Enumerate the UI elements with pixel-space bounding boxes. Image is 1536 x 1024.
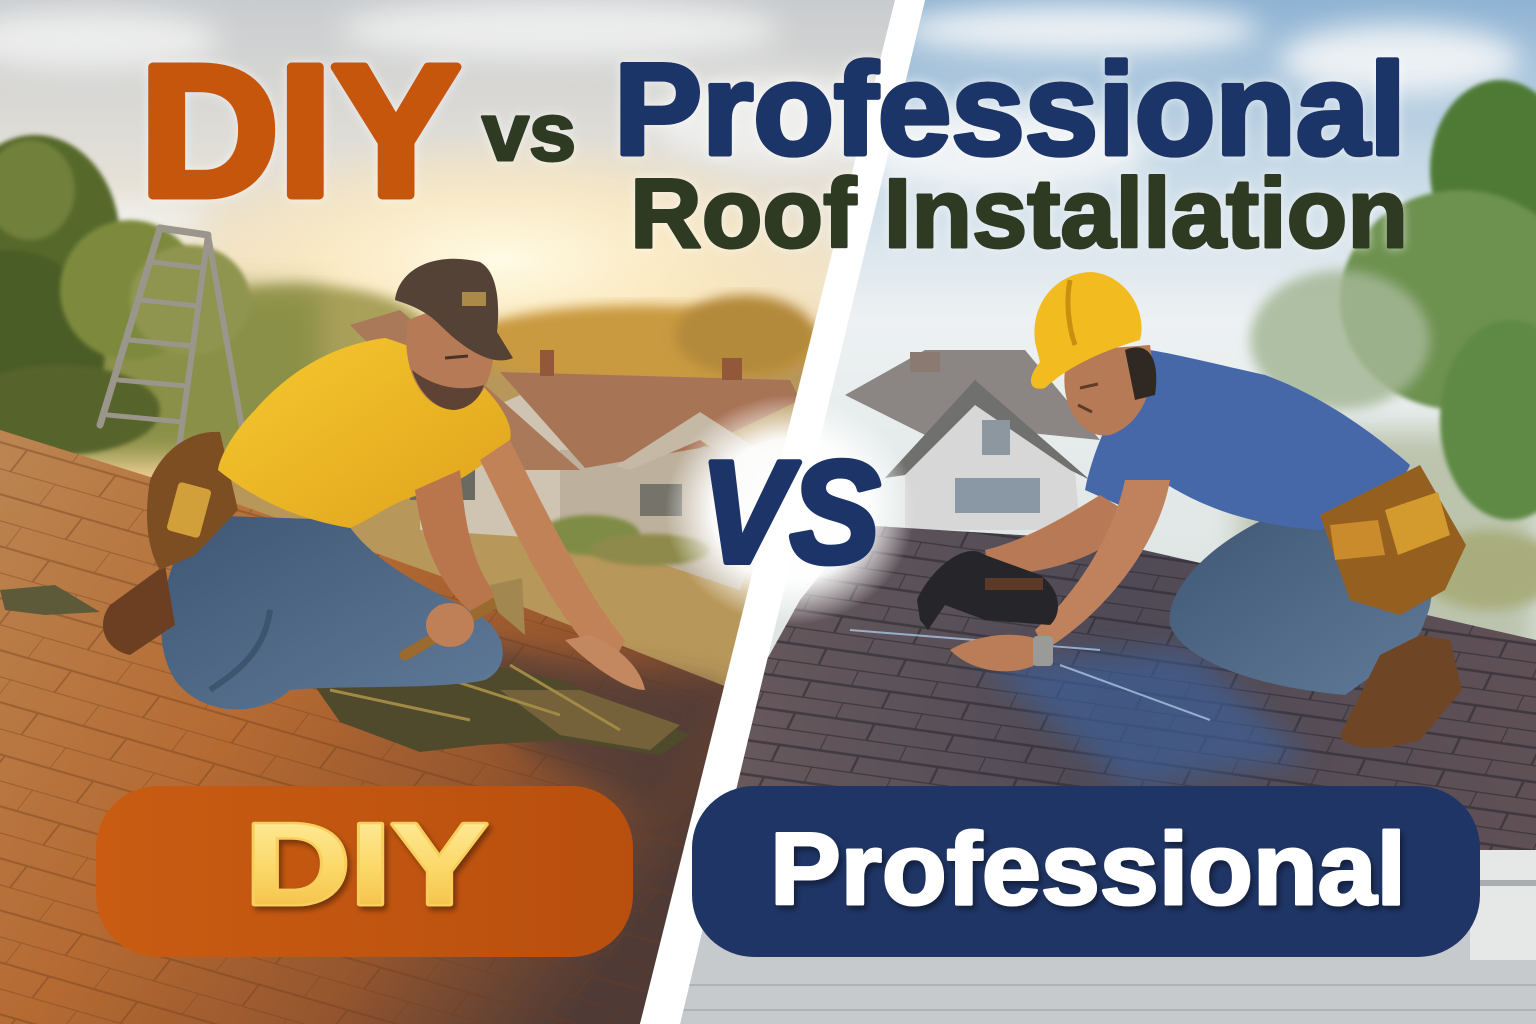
- hard hat: [1031, 272, 1142, 389]
- sky and clouds: [768, 0, 1536, 658]
- title: DIY: DIY: [140, 28, 460, 235]
- white diagonal divider: [640, 0, 925, 1024]
- torn shingles: [0, 585, 690, 755]
- subtitle: Roof Installation: Roof Installation: [630, 158, 1408, 268]
- label pill: DIY: [96, 786, 633, 957]
- pill text: Professional: Professional: [770, 812, 1406, 926]
- house: [350, 310, 800, 590]
- boot: [103, 565, 175, 655]
- trees right: [1240, 80, 1536, 660]
- distant trees and ground: [224, 277, 816, 686]
- boot: [1340, 635, 1462, 748]
- jeans: [161, 515, 503, 709]
- Professional worker: [917, 272, 1466, 748]
- shirt: [218, 338, 511, 528]
- head: [406, 313, 493, 410]
- head: [1064, 345, 1152, 436]
- fascia board: [660, 850, 1536, 1024]
- tool belt: [147, 432, 238, 570]
- label pill: Professional: [692, 786, 1480, 957]
- pill text: DIY: DIY: [245, 799, 488, 929]
- ladder: [100, 228, 248, 462]
- title: Professional: Professional: [614, 36, 1406, 182]
- house: [845, 350, 1100, 530]
- jeans: [1170, 510, 1432, 695]
- arm: [415, 470, 494, 611]
- VS badge text: VS: [700, 431, 880, 593]
- title: vs: vs: [482, 87, 576, 178]
- panel: Professional scene: [640, 0, 1536, 1024]
- nail gun: [917, 551, 1058, 630]
- shirt: [1085, 350, 1410, 530]
- tool belt: [1320, 465, 1466, 615]
- DIY worker: [103, 259, 645, 709]
- sky and clouds: [0, 0, 895, 478]
- roof shingles: [736, 526, 1536, 850]
- roof shingles: [0, 430, 760, 1024]
- hand and hammer: [405, 600, 500, 655]
- panel: DIY scene: [0, 0, 930, 1024]
- vs glow: [665, 395, 915, 625]
- trees left: [0, 135, 320, 460]
- arm: [985, 495, 1118, 572]
